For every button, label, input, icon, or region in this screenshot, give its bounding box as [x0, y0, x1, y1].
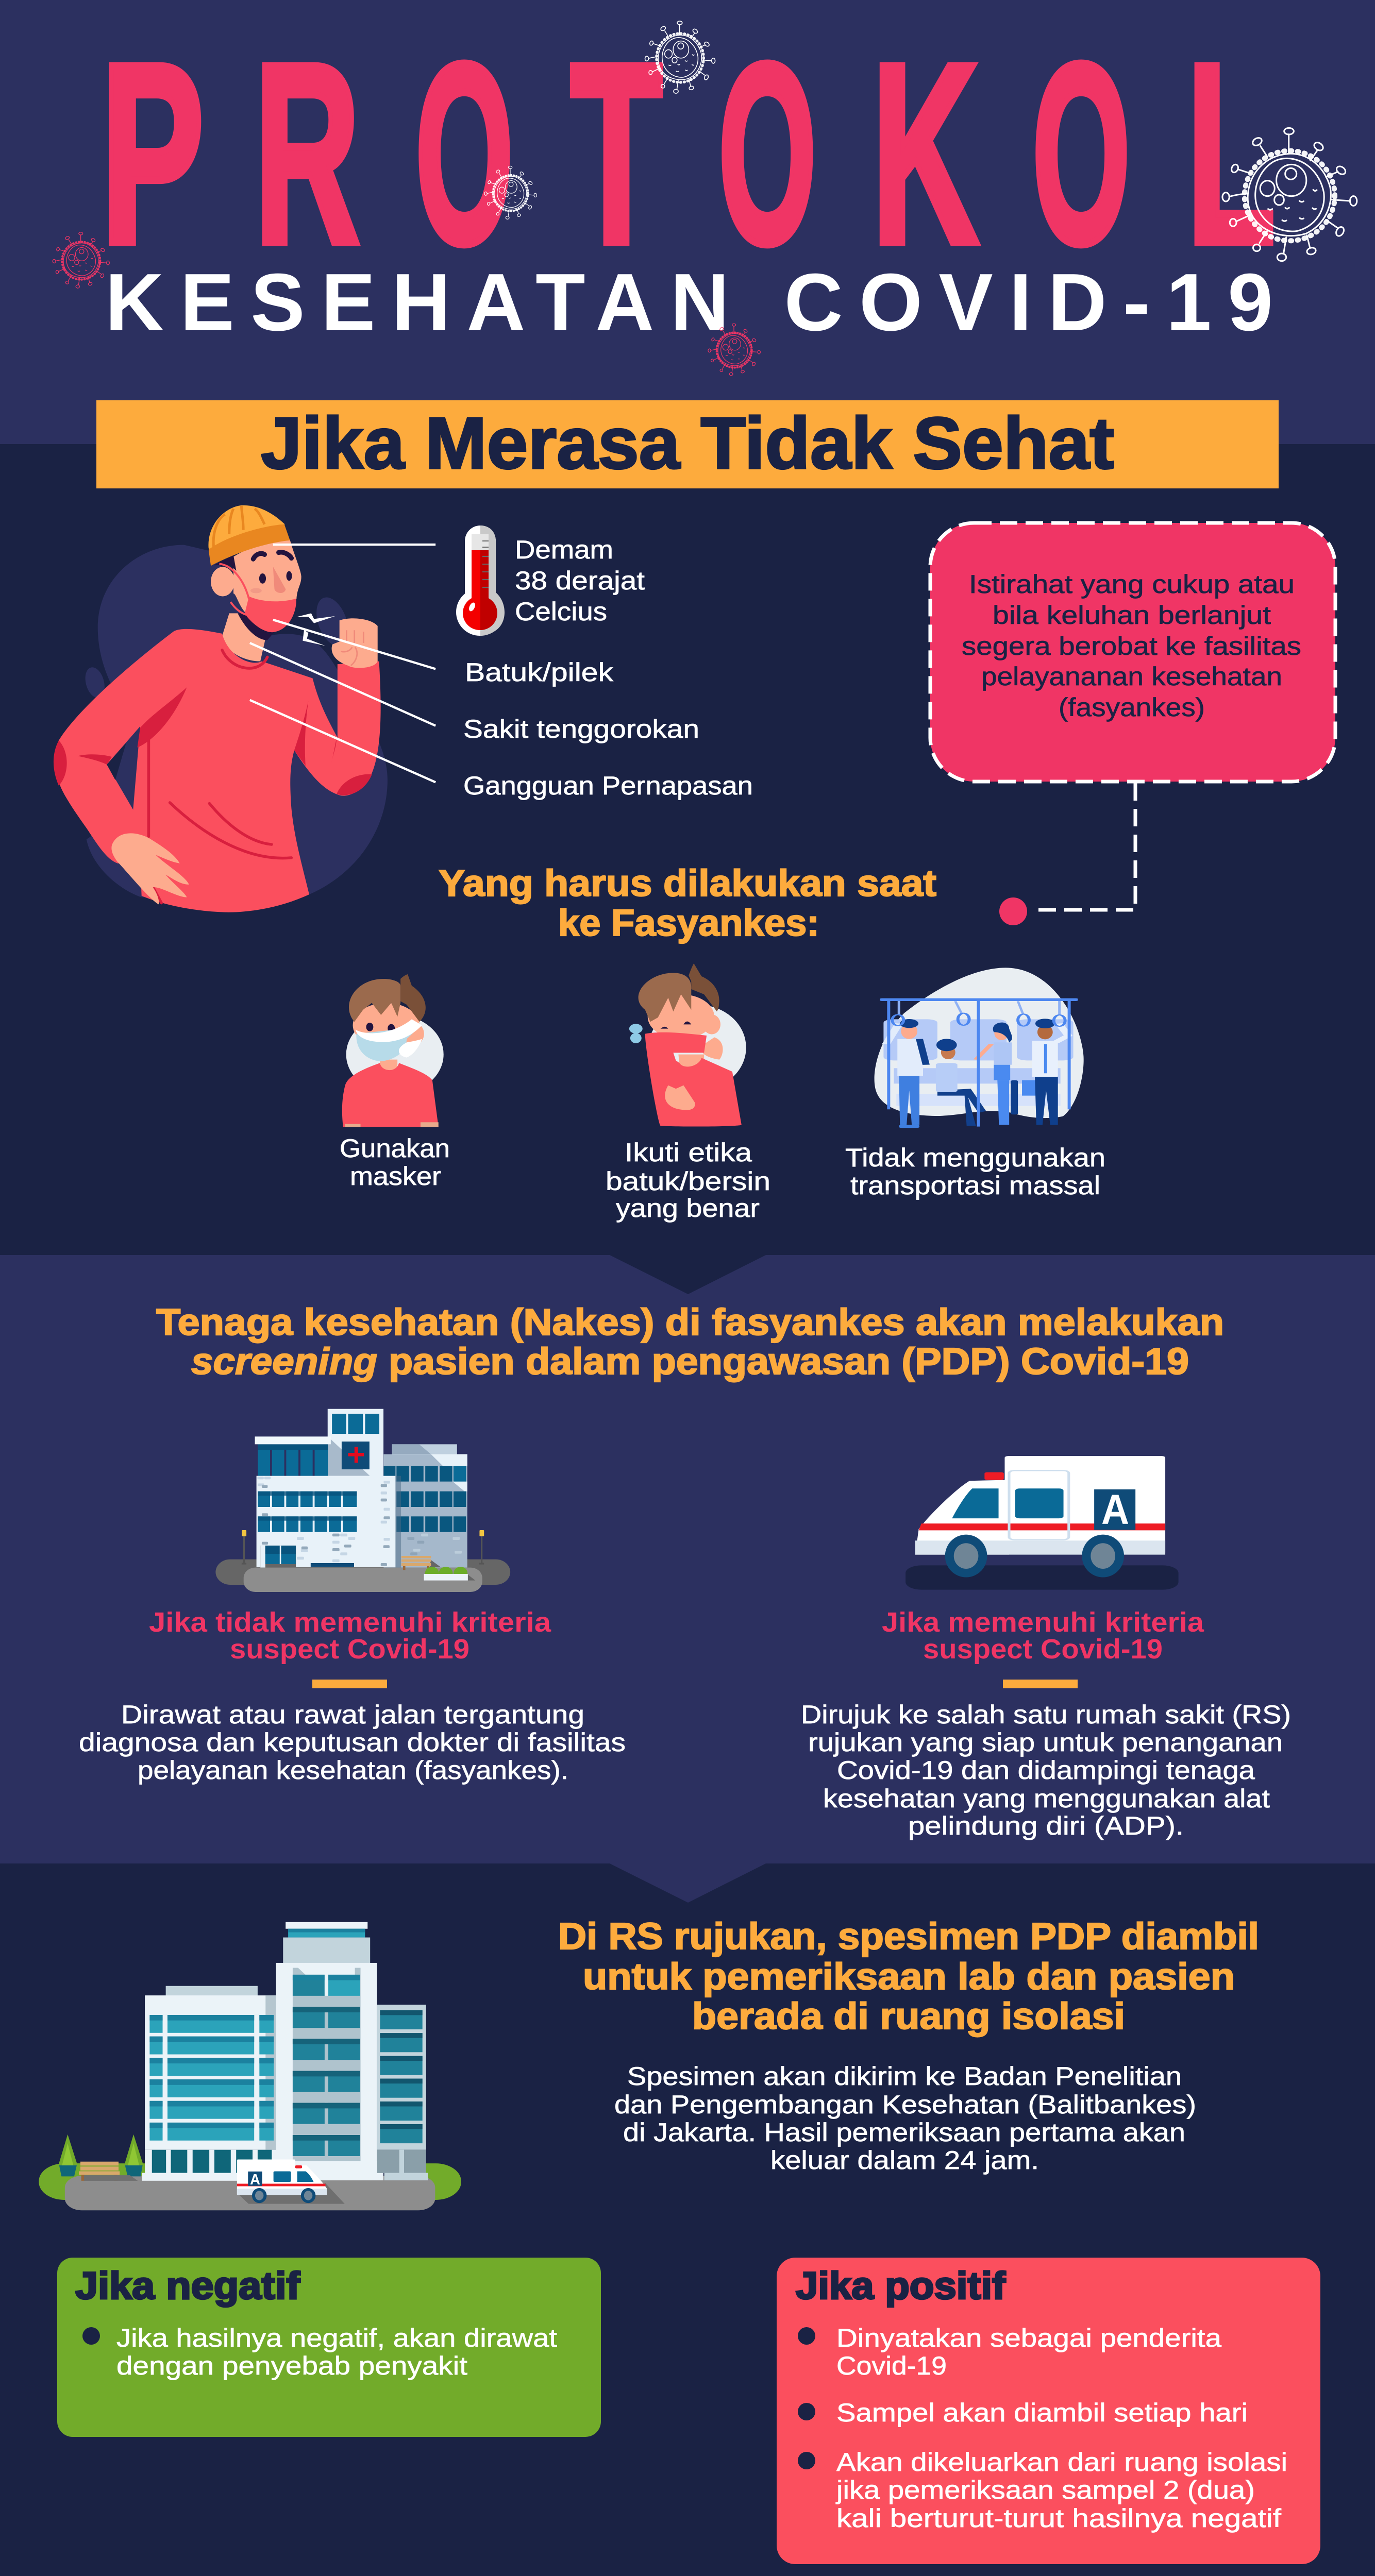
heading bar: Jika Merasa Tidak Sehat: Jika Merasa Tidak Sehat: [261, 402, 1114, 484]
text block: specimen: Spesimen akan dikirim ke Badan Penelitian: [627, 2062, 1182, 2091]
illustration: sick man coughing: [54, 505, 435, 912]
labels for what to do: yang benar: [616, 1194, 760, 1223]
panel: not suspect: pelayanan kesehatan (fasyankes).: [138, 1756, 568, 1785]
symptom labels: Celcius: [515, 597, 607, 626]
panel: not suspect: Jika tidak memenuhi kriteria: [149, 1607, 551, 1638]
panel: suspect: [801, 1607, 1291, 1840]
panel: negative result: Jika hasilnya negatif, akan dirawat: [116, 2324, 557, 2352]
heading: Yang harus dilakukan: Yang harus dilakukan saat: [439, 863, 936, 904]
text block: specimen: keluar dalam 24 jam.: [770, 2146, 1039, 2175]
icon: boy coughing into elbow: [629, 963, 746, 1127]
panel: suspect: pelindung diri (ADP).: [908, 1811, 1184, 1840]
title: PROTOKOL: L: [1187, 11, 1276, 297]
heading: Yang harus dilakukan: ke Fasyankes:: [558, 903, 819, 944]
title: PROTOKOL: O: [718, 11, 816, 297]
panel: positive result: kali berturut-turut hasilnya negatif: [836, 2504, 1281, 2533]
panel: suspect: rujukan yang siap untuk penanganan: [808, 1728, 1283, 1757]
illustration: hospital: [215, 1409, 510, 1592]
heading: Tenaga kesehatan: [156, 1302, 1224, 1382]
labels for what to do: Gunakan: [340, 1134, 450, 1163]
panel: positive result: Dinyatakan sebagai penderita: [836, 2324, 1221, 2352]
panel: not suspect: [79, 1607, 626, 1785]
heading: Di RS rujukan: berada di ruang isolasi: [692, 1996, 1125, 2037]
symptom labels: Demam: [515, 535, 613, 564]
panel: positive result: [777, 2258, 1320, 2564]
symptom labels: Sakit tenggorokan: [463, 715, 699, 743]
heading: Tenaga kesehatan: Tenaga kesehatan (Nakes) di fasyankes akan melakukan: [156, 1302, 1224, 1343]
callout: rest or seek care: Istirahat yang cukup atau: [969, 570, 1295, 599]
panel: suspect: Covid-19 dan didampingi tenaga: [837, 1756, 1255, 1785]
panel: negative result: [57, 2258, 601, 2437]
panel: positive result: Sampel akan diambil setiap hari: [836, 2398, 1248, 2427]
panel: not suspect: suspect Covid-19: [230, 1634, 469, 1665]
symptom labels: Batuk/pilek: [465, 658, 614, 687]
heading: Di RS rujukan: untuk pemeriksaan lab dan pasien: [583, 1956, 1235, 1997]
title: PROTOKOL: T: [571, 11, 662, 297]
panel: positive result: Covid-19: [836, 2351, 947, 2380]
heading: Yang harus dilakukan: [439, 863, 936, 944]
text block: specimen: dan Pengembangan Kesehatan (Balitbankes): [614, 2090, 1196, 2119]
icon: thermometer: [456, 526, 505, 636]
callout: rest or seek care: bila keluhan berlanjut: [993, 601, 1271, 630]
heading: Tenaga kesehatan: pasien dalam pengawasan (PDP) Covid-19: [389, 1341, 1189, 1382]
icon: virus pink left: [53, 232, 109, 288]
title: PROTOKOL: O: [415, 11, 513, 297]
title: PROTOKOL: O: [1032, 11, 1130, 297]
text block: specimen: di Jakarta. Hasil pemeriksaan pertama akan: [623, 2118, 1185, 2147]
callout: rest or seek care: [930, 523, 1335, 782]
labels for what to do: batuk/bersin: [606, 1167, 770, 1196]
arrow: dashed connector to heading: [999, 783, 1135, 925]
icon: virus large white: [1222, 128, 1357, 261]
text block: specimen: [614, 2062, 1196, 2175]
panel: positive result: Jika positif: [796, 2264, 1005, 2307]
panel: suspect: Jika memenuhi kriteria: [882, 1607, 1204, 1638]
panel: negative result: dengan penyebab penyakit: [116, 2351, 467, 2380]
subtitle: Kesehatan Covid-19: KESEHATAN COVID-19: [105, 257, 1273, 348]
symptom labels: Gangguan Pernapasan: [463, 771, 753, 800]
labels for what to do: transportasi massal: [850, 1171, 1100, 1200]
panel: suspect: Dirujuk ke salah satu rumah sakit (RS): [801, 1700, 1291, 1729]
symptom labels: 38 derajat: [515, 566, 645, 595]
icon: virus pink bottom: [708, 324, 760, 376]
illustration: ambulance: A: [1101, 1486, 1129, 1533]
icon: virus small white top: [645, 21, 715, 93]
callout: rest or seek care: (fasyankes): [1059, 693, 1205, 722]
labels for what to do: Ikuti etika: [625, 1138, 752, 1167]
symptom labels: [463, 535, 753, 800]
labels for what to do: [340, 1134, 1105, 1223]
icon: crowded public transport: [875, 968, 1084, 1128]
title: PROTOKOL: [101, 11, 1276, 297]
callout: rest or seek care: pelayananan kesehatan: [981, 662, 1282, 691]
panel: not suspect: Dirawat atau rawat jalan tergantung: [121, 1700, 584, 1729]
panel: positive result: jika pemeriksaan sampel 2 (dua): [835, 2476, 1255, 2504]
labels for what to do: masker: [350, 1162, 441, 1191]
title: PROTOKOL: P: [101, 11, 204, 297]
icon: virus small white middle: [484, 166, 536, 219]
callout: rest or seek care: segera berobat ke fasilitas: [962, 632, 1301, 660]
panel: positive result: Akan dikeluarkan dari ruang isolasi: [836, 2448, 1287, 2477]
panel: suspect: suspect Covid-19: [923, 1634, 1163, 1665]
panel: not suspect: diagnosa dan keputusan dokter di fasilitas: [79, 1728, 626, 1757]
illustration: ambulance: [906, 1456, 1179, 1590]
heading: Di RS rujukan: [558, 1916, 1259, 2037]
panel: negative result: Jika negatif: [75, 2264, 300, 2307]
illustration: referral hospital with ambulance: [39, 1922, 461, 2210]
heading: Di RS rujukan: Di RS rujukan, spesimen PDP diambil: [558, 1916, 1259, 1957]
heading bar: Jika Merasa Tidak Sehat: [96, 400, 1279, 488]
title: PROTOKOL: R: [255, 11, 360, 297]
labels for what to do: Tidak menggunakan: [845, 1143, 1105, 1172]
panel: suspect: kesehatan yang menggunakan alat: [823, 1784, 1270, 1813]
heading: Tenaga kesehatan: screening: [191, 1341, 377, 1382]
illustration: referral hospital with ambulance: A: [250, 2172, 260, 2188]
title: PROTOKOL: K: [872, 11, 978, 297]
icon: boy with mask: [342, 974, 444, 1127]
